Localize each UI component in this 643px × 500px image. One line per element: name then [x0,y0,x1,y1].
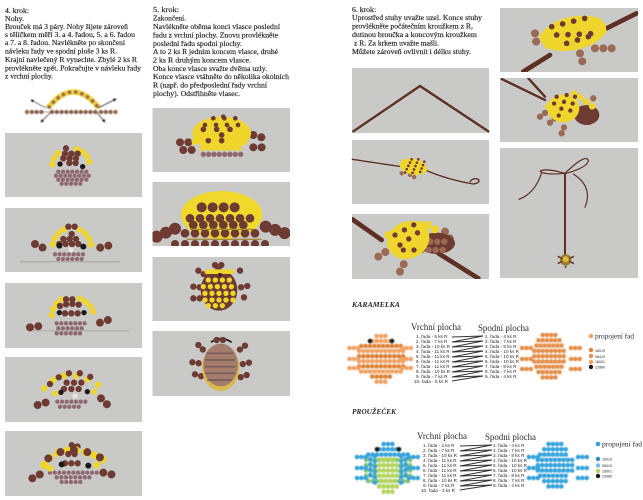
text block: step 6: z R. Za krkem uvažte mašli. [354,38,439,48]
text block: step 4: z vrchní plochy. [5,72,53,80]
row list: Karamelka top surface: 5. řada - 11 ks R [416,354,450,359]
legend: Karamelka [589,332,634,370]
photo: beetle on ribbon, side view [500,8,638,72]
row list: Prouzeček bottom surface: 2. řada - 7 ks R [493,448,525,453]
heading: Prouzeček: PROUŽEČEK [352,406,397,416]
row list: Prouzeček bottom surface: 7. řada - 8 ks R [493,473,525,478]
text block: step 5: plochy). Odstřihněte vlasec. [153,89,240,98]
legend: Karamelka: propojení řad [595,332,634,340]
text block: step 4: návleku řady ve spodní ploše 3 ks R. [5,46,117,55]
row list: Prouzeček bottom surface: 1. řada - 4 ks R [493,443,525,448]
photo: step 5, close-up of threading [152,182,290,246]
row list: Prouzeček bottom surface [493,443,528,488]
pattern: Prouzeček top surface [357,444,420,492]
text block: step 5: Zakončení. [153,14,186,22]
row list: Karamelka bottom surface: 6. řada - 10 ks R [485,359,520,364]
legend: Karamelka: 16001 [595,360,605,364]
row list: Prouzeček bottom surface: 5. řada - 10 ks R [493,463,528,468]
row list: Prouzeček top surface: 1. řada - 3 ks R [423,443,455,448]
text block: step 5: Oba konce vlasce svažte dvěma uzly. [153,64,267,73]
pattern: Karamelka bottom surface [522,335,582,377]
text block: step 5: A to 2 ks R jedním koncem vlasce, druhé [153,47,279,56]
legend: Prouzeček: 08419 [602,464,612,468]
photo: step 5, closing the body [152,108,290,172]
photo: close-up of beetle on ribbon [352,214,489,279]
row list: Karamelka bottom surface: 2. řada - 7 ks R [485,339,517,344]
text block: step 5: Navlékněte oběma konci vlasce poslední [153,22,280,31]
heading: Prouzeček bottom surface: Spodní plocha [485,432,536,442]
legend: Prouzeček: 23980 [602,474,612,478]
text block: step 5: 2 ks R druhým koncem vlasce. [153,56,251,64]
photo: step 4, first pair of legs [5,208,142,272]
row list: Prouzeček top surface [421,443,458,493]
row list: Karamelka bottom surface: 3. řada - 8 ks R [485,344,517,349]
photo: finished pendant with bow [500,148,638,278]
row list: Karamelka bottom surface [485,334,520,379]
row list: Karamelka top surface: 1. řada - 5 ks R [416,334,448,339]
text block: step 4: s tělíčkem měří 3. a 4. řadou, 5. a 6. řadou [5,30,135,39]
legend: Prouzeček: 16001 [602,470,612,474]
legend: Karamelka: 23980 [595,366,605,370]
row list: Prouzeček bottom surface: 4. řada - 10 ks R [493,458,528,463]
row list: Prouzeček bottom surface: 3. řada - 8 ks R [493,453,525,458]
photo: step 5, finished beetle underside [152,331,290,396]
row list: Karamelka top surface [414,334,451,384]
text block: step 6: Můžete zároveň ovlivnit i délku stuhy. [352,47,471,56]
photo: step 4, third pair of legs [5,357,142,422]
text block: step 4 [5,6,141,80]
photo: step 4, finished lower plate [5,431,142,496]
arrows: Prouzeček thread path [460,445,492,490]
row list: Karamelka top surface: 7. řada - 11 ks R [416,364,450,369]
legend: Karamelka: 08419 [595,355,605,359]
row list: Prouzeček bottom surface: 8. řada - 7 ks R [493,478,525,483]
text block: step 5: řadu z vrchní plochy. Znovu provlékněte [153,30,279,40]
row list: Karamelka top surface: 4. řada - 11 ks R [416,349,450,354]
text block: step 4: Krajní navlečený R vynechte. Zbylé 2 ks R [5,55,137,64]
photo: beetle on ribbon, top view [500,78,638,142]
row list: Karamelka top surface: 8. řada - 10 ks R [416,369,451,374]
text block: step 5: R (např. do předposlední řady vrchní [153,80,267,90]
pattern: Karamelka top surface [350,336,412,382]
text block: step 6: provlékněte počátečním kroužkem z R, [352,21,473,30]
text block: step 4: 4. krok: [5,6,29,15]
photo: step 5, finished beetle top [152,257,290,321]
heading: Karamelka bottom surface: Spodní plocha [478,323,529,333]
row list: Prouzeček top surface: 2. řada - 7 ks R [423,448,455,453]
text block: step 4: a 7. a 8. řadou. Navlékněte po skončení [5,38,125,47]
row list: Prouzeček top surface: 3. řada - 10 ks R [423,453,458,458]
row list: Prouzeček top surface: 9. řada - 7 ks R [423,483,455,488]
legend: Karamelka: 16019 [595,349,605,353]
row list: Karamelka top surface: 2. řada - 7 ks R [416,339,448,344]
text block: step 4: Brouček má 3 páry. Nohy šijete zároveň [5,22,128,31]
row list: Karamelka bottom surface: 9. řada - 4 ks R [485,374,517,379]
legend: Prouzeček: propojení řad [602,440,642,448]
text block: step 6: dutinou broučka a koncovým kroužkem [352,30,477,39]
text block: step 4: provlékněte zpět. Pokračujte v návleku řady [5,63,141,72]
pattern: Prouzeček bottom surface [529,444,588,486]
row list: Karamelka bottom surface: 1. řada - 4 ks R [485,334,517,339]
row list: Prouzeček top surface: 7. řada - 11 ks R [423,473,457,478]
text block: step 5: Konce vlasce vtáhněte do několika okolních [153,72,289,81]
row list: Karamelka bottom surface: 5. řada - 10 ks R [485,354,520,359]
row list: Karamelka bottom surface: 7. řada - 8 ks R [485,364,517,369]
row list: Karamelka top surface: 6. řada - 11 ks R [416,359,450,364]
text block: step 5: poslední řadu spodní plochy. [153,39,242,48]
row list: Prouzeček bottom surface: 6. řada - 10 ks R [493,468,528,473]
heading: Karamelka: KARAMELKA [351,300,400,309]
photo: step 4, second pair of legs [5,283,142,348]
diagram: threading the legs [27,92,116,122]
heading: Prouzeček top surface: Vrchní plocha [417,431,467,441]
row list: Karamelka top surface: 10. řada - 5 ks R [414,379,449,384]
text block: step 4: Nohy. [5,14,24,23]
row list: Karamelka top surface: 3. řada - 10 ks R [416,344,451,349]
text block: step 5 [153,5,289,98]
row list: Prouzeček bottom surface: 9. řada - 4 ks R [493,483,525,488]
text block: step 6: Uprostřed stuhy uvažte uzel. Konce stuhy [352,13,482,22]
arrows: Karamelka thread path [452,336,483,381]
row list: Karamelka bottom surface: 4. řada - 10 ks R [485,349,520,354]
legend: Prouzeček [596,440,642,478]
row list: Prouzeček top surface: 10. řada - 3 ks R [421,488,456,493]
row list: Prouzeček top surface: 5. řada - 11 ks R [423,463,457,468]
photo: ribbon with knot [352,68,489,133]
text block: step 6: 6. krok: [352,5,376,14]
heading: Karamelka top surface: Vrchní plocha [411,322,461,332]
row list: Karamelka top surface: 9. řada - 7 ks R [416,374,448,379]
row list: Karamelka bottom surface: 8. řada - 7 ks R [485,369,517,374]
row list: Prouzeček top surface: 4. řada - 11 ks R [423,458,457,463]
row list: Prouzeček top surface: 6. řada - 11 ks R [423,468,457,473]
legend: Prouzeček: 16019 [602,458,612,462]
text block: step 6 [352,5,482,56]
row list: Prouzeček top surface: 8. řada - 10 ks R [423,478,458,483]
photo: step 4, first row of beads [5,133,142,197]
text block: step 5: 5. krok: [153,5,179,14]
photo: ribbon threaded through beetle [352,140,489,204]
